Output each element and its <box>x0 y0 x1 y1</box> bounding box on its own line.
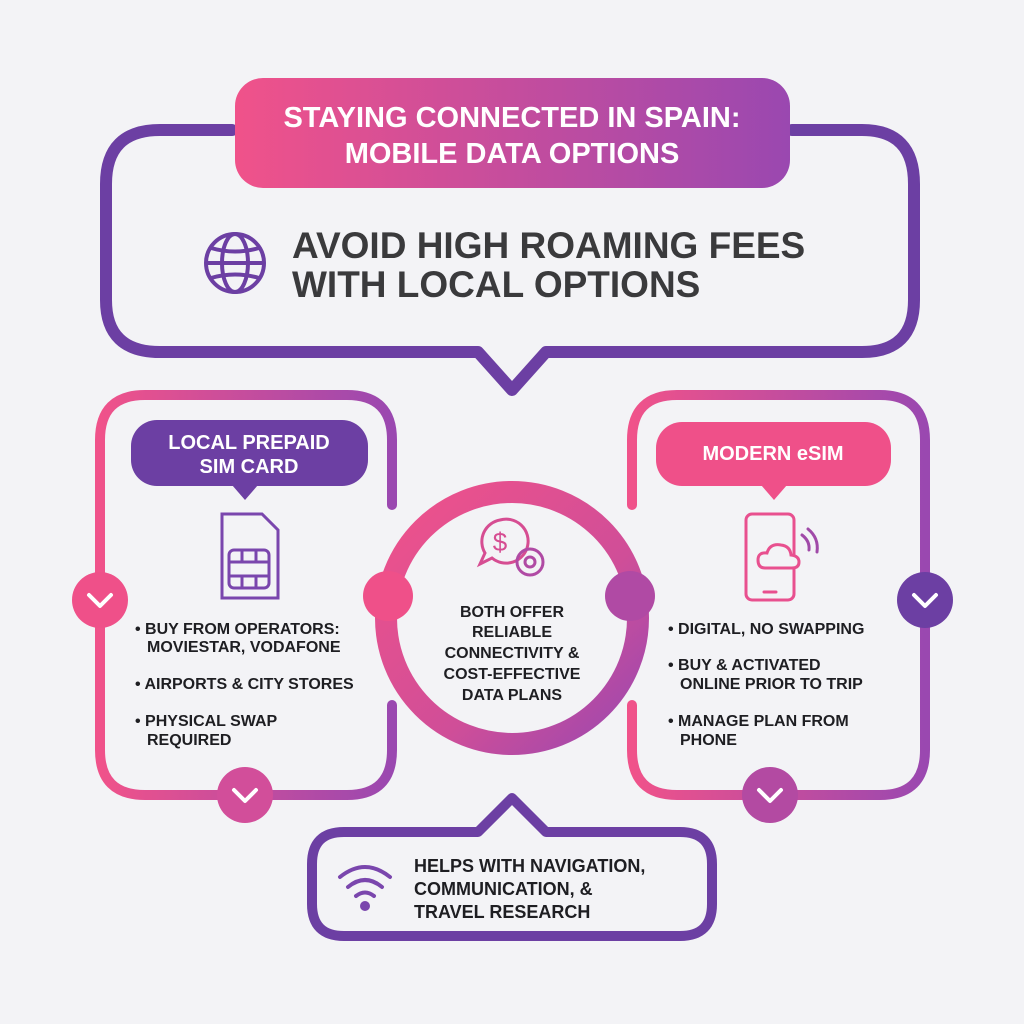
icon: sim card <box>222 514 278 598</box>
text: esim bullets: • BUY & ACTIVATED <box>668 657 821 674</box>
text: esim bullets <box>668 621 864 749</box>
text: sim bullets <box>135 621 354 749</box>
text: center: COST-EFFECTIVE <box>444 666 581 683</box>
text: sim bullets: MOVIESTAR, VODAFONE <box>147 639 341 656</box>
icon: chevron bottom right <box>742 767 798 823</box>
panel: modern esim <box>632 395 953 823</box>
text: esim bullets: • MANAGE PLAN FROM <box>668 713 849 730</box>
icon: dollar bubble and gear: $ <box>493 527 508 557</box>
text: sim bullets: • BUY FROM OPERATORS: <box>135 621 340 638</box>
text: esim bullets: PHONE <box>680 732 737 749</box>
title: MOBILE DATA OPTIONS <box>345 138 679 170</box>
text: center: DATA PLANS <box>462 687 562 704</box>
text: center: BOTH OFFER <box>460 604 564 621</box>
bottom box with pointer <box>312 798 712 936</box>
panel: local prepaid sim <box>72 395 392 823</box>
label: local prepaid sim card: LOCAL PREPAID <box>168 432 330 454</box>
text: sim bullets: • AIRPORTS & CITY STORES <box>135 676 354 693</box>
title <box>235 78 790 188</box>
label: modern esim: MODERN eSIM <box>702 443 844 465</box>
text: bottom: COMMUNICATION, & <box>414 879 593 899</box>
subtitle: AVOID HIGH ROAMING FEES <box>292 225 805 266</box>
top frame with pointer <box>106 130 914 390</box>
subtitle <box>292 225 805 305</box>
text: esim bullets: ONLINE PRIOR TO TRIP <box>680 676 863 693</box>
text: center: RELIABLE <box>472 624 552 641</box>
text: bottom: HELPS WITH NAVIGATION, <box>414 856 645 876</box>
text: center <box>444 604 581 704</box>
text: bottom <box>414 856 645 922</box>
label: local prepaid sim card: SIM CARD <box>200 456 298 478</box>
label: local prepaid sim card <box>131 420 368 500</box>
text: bottom: TRAVEL RESEARCH <box>414 902 590 922</box>
icon: chevron left <box>72 572 128 628</box>
text: sim bullets: • PHYSICAL SWAP <box>135 713 278 730</box>
icon: chevron right <box>897 572 953 628</box>
icon: phone with cloud <box>746 514 817 600</box>
icon: chevron bottom left <box>217 767 273 823</box>
icon: globe <box>206 234 264 292</box>
label: modern esim <box>656 422 891 500</box>
subtitle: WITH LOCAL OPTIONS <box>292 264 700 305</box>
text: center: CONNECTIVITY & <box>445 645 580 662</box>
icon: wifi <box>340 867 390 909</box>
title: STAYING CONNECTED IN SPAIN: <box>283 102 741 134</box>
icon: dollar bubble and gear <box>480 519 543 575</box>
center circle <box>363 492 655 744</box>
text: sim bullets: REQUIRED <box>147 732 231 749</box>
text: esim bullets: • DIGITAL, NO SWAPPING <box>668 621 864 638</box>
